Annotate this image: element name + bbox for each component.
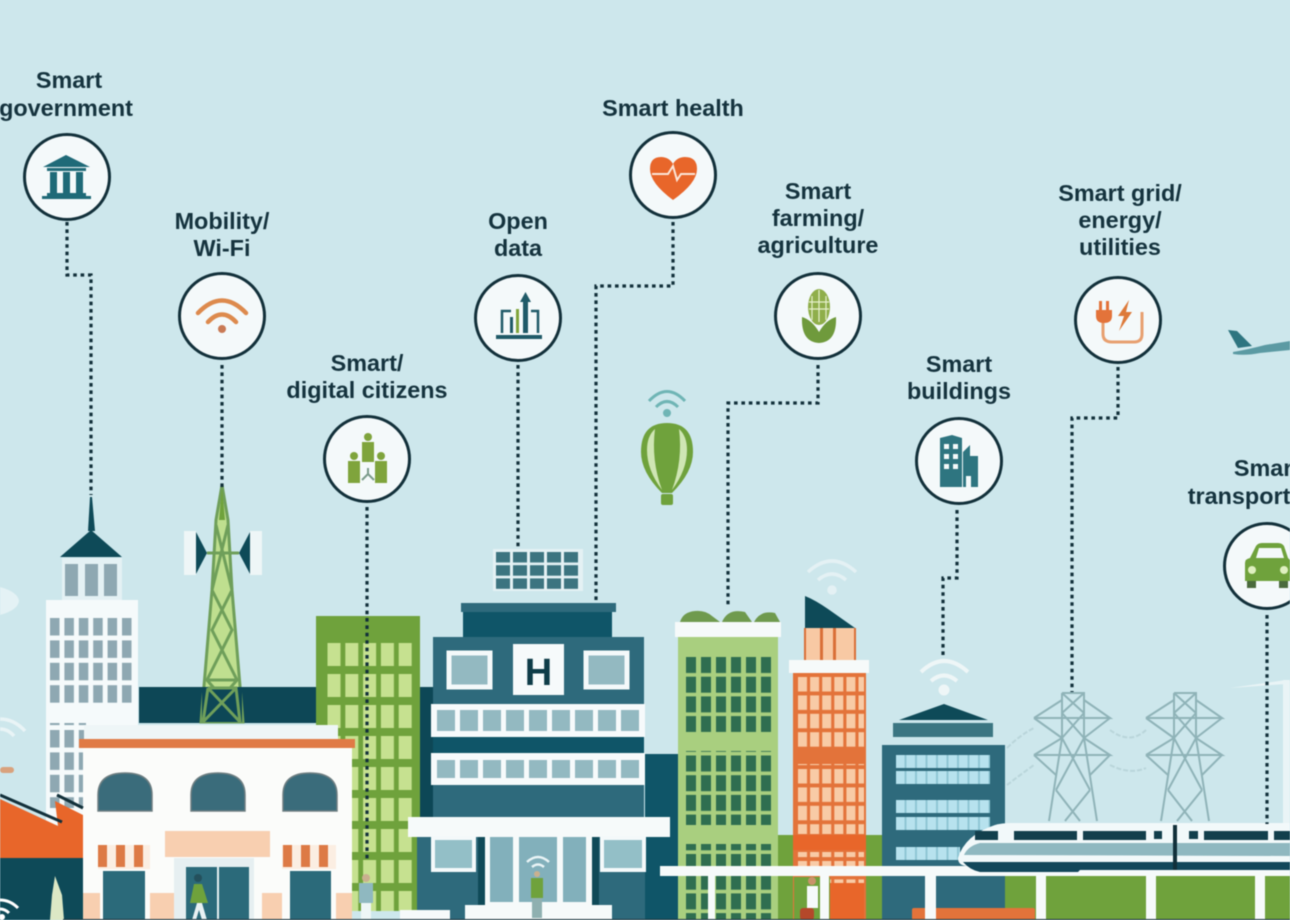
power pylons — [1007, 693, 1222, 821]
label: digital citizens: Smart/ — [331, 350, 404, 376]
factory — [0, 795, 83, 920]
orange ground block — [912, 908, 1035, 920]
circle icon: citizens — [324, 416, 410, 502]
H sign: H — [525, 652, 552, 694]
person in white — [800, 877, 818, 920]
green office building — [316, 616, 420, 911]
label: smart farming: agriculture — [758, 232, 878, 258]
dark rear building band — [139, 687, 319, 723]
green tower — [675, 611, 781, 920]
balloon wifi — [649, 392, 685, 416]
arched windows — [98, 773, 337, 811]
government tower — [46, 497, 138, 825]
train windows — [975, 831, 1290, 840]
dark rear building right of green office — [420, 687, 434, 817]
connector: smart government — [67, 222, 91, 495]
connector: health — [596, 222, 673, 602]
label: smart farming: Smart — [785, 178, 851, 204]
entrance doors — [485, 837, 592, 905]
person at door — [190, 874, 208, 920]
person beside green office — [359, 874, 373, 920]
label: smart farming: farming/ — [772, 205, 865, 231]
label: digital citizens: digital citizens — [286, 377, 448, 403]
label: smart health: Smart health — [602, 95, 744, 121]
cloud — [0, 587, 19, 615]
connector: buildings — [943, 510, 957, 655]
entrance canopy — [408, 817, 670, 837]
shop sign — [165, 831, 270, 857]
shop door — [174, 858, 254, 920]
label: smart buildings: Smart — [926, 351, 992, 377]
connector: open data — [516, 365, 520, 550]
circle icon: health — [630, 132, 716, 218]
label: smart grid: energy/ — [1078, 207, 1162, 233]
person with wifi — [527, 857, 549, 918]
label: mobility wifi: Wi-Fi — [194, 235, 250, 261]
shop windows — [103, 871, 145, 920]
awnings — [98, 845, 336, 869]
wifi left, white — [0, 719, 25, 736]
connector: mobility — [220, 365, 224, 487]
wind turbine — [1230, 680, 1290, 825]
label: open data: data — [494, 235, 543, 261]
hot-air balloon — [641, 392, 693, 505]
roof garden — [680, 611, 780, 622]
pylon right — [1146, 693, 1222, 821]
label: smart government: government — [0, 95, 133, 121]
rear block — [645, 754, 678, 920]
elevated rail with pillars — [660, 866, 1290, 920]
orange tower — [789, 596, 869, 920]
wifi over orange tower — [808, 561, 856, 593]
H sign — [513, 644, 564, 695]
circle icon: energy — [1076, 278, 1160, 362]
green ground — [1005, 876, 1290, 920]
shop building — [79, 725, 355, 920]
circle icon: open data — [476, 276, 560, 360]
image bottom edge — [63, 919, 1290, 920]
steps — [465, 905, 612, 920]
peach skirting — [83, 893, 352, 920]
antenna mast — [184, 485, 262, 722]
window bands — [431, 704, 645, 785]
circle icon: farming — [776, 274, 860, 358]
person in yellow — [50, 876, 64, 920]
pylon left — [1034, 693, 1110, 821]
wires — [1007, 728, 1146, 785]
label: mobility wifi: Mobility/ — [175, 208, 270, 234]
solar panel — [493, 549, 583, 591]
wifi symbol — [0, 900, 18, 913]
label: smart grid: utilities — [1079, 234, 1161, 260]
train — [958, 823, 1290, 872]
upper windows — [449, 653, 627, 687]
connector: farming — [728, 365, 818, 606]
label: open data: Open — [488, 208, 548, 234]
circle icon: transport — [1224, 524, 1290, 608]
wifi over smart building — [921, 661, 968, 694]
label: smart grid: Smart grid/ — [1058, 180, 1182, 206]
circle icon: wifi — [180, 274, 264, 358]
label: smart buildings: buildings — [907, 378, 1011, 404]
hospital — [400, 603, 678, 920]
connector: transport — [1265, 615, 1269, 824]
circle icon: buildings — [916, 418, 1002, 504]
roof sign left edge — [0, 767, 14, 773]
circle icon: smart government — [24, 134, 110, 220]
airplane — [1228, 330, 1290, 355]
smart building — [882, 704, 1005, 920]
lower windows — [433, 838, 644, 870]
label: smart government: Smart — [36, 67, 102, 93]
connector: grid — [1072, 367, 1118, 692]
connector: citizens — [365, 507, 369, 860]
green low block — [778, 835, 883, 920]
